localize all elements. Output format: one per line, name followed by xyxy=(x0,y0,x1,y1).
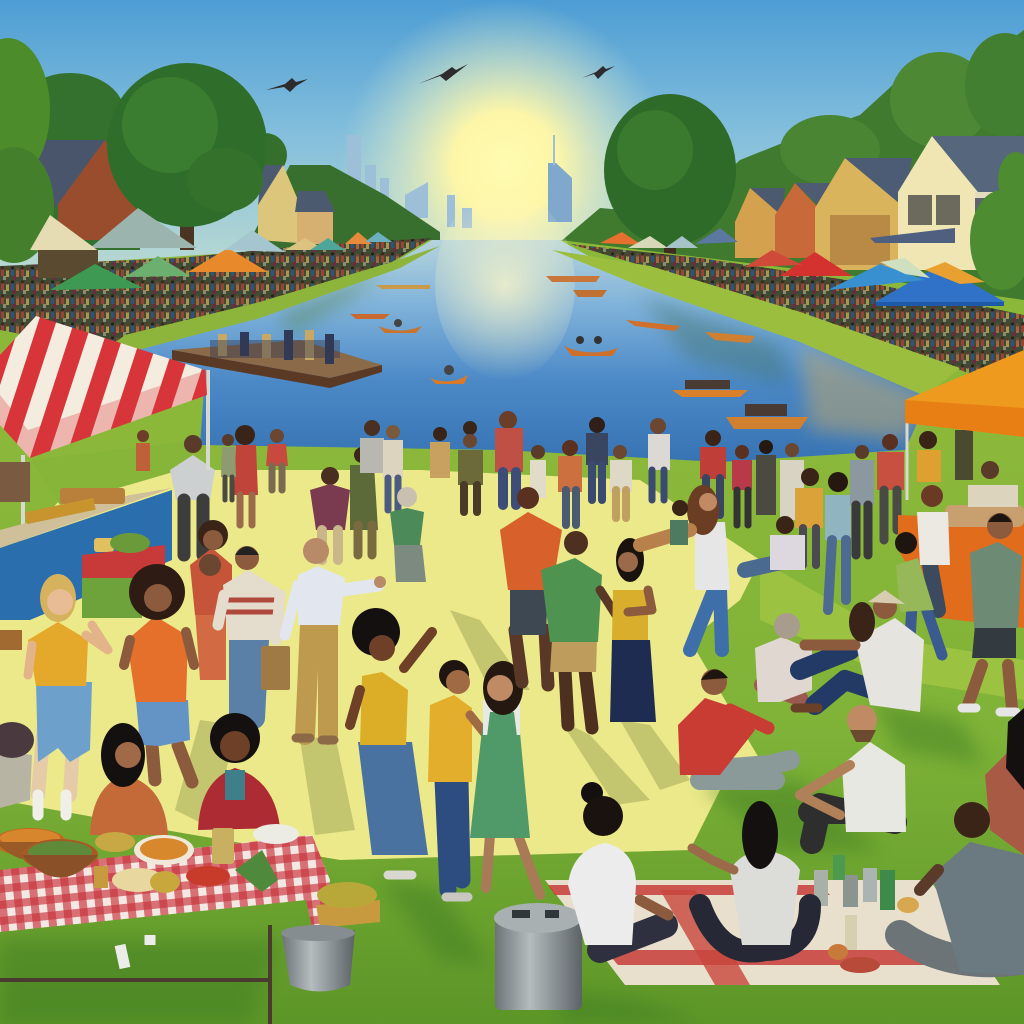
person: man green shirt xyxy=(541,531,630,728)
crowd: left shore xyxy=(0,238,432,350)
person: seated woman white tee, back view xyxy=(692,801,810,952)
person: woman red cardigan with afro xyxy=(198,713,280,830)
stage platform on lake xyxy=(172,330,382,388)
person: right man gray tee xyxy=(962,513,1022,712)
grass patch: left of tent xyxy=(30,440,200,505)
person: woman navy long dress xyxy=(610,538,656,722)
grass: sun-dappled right xyxy=(760,560,1024,700)
grassy strip: left bank xyxy=(105,246,440,352)
background hills right xyxy=(560,30,1024,300)
person: woman behind food table xyxy=(90,723,168,835)
house: large cream right xyxy=(870,136,1024,270)
person shadows xyxy=(175,610,690,835)
person: edge woman patterned dress xyxy=(985,708,1024,855)
food bowls and dishes xyxy=(0,824,299,893)
person: woman white top and jeans walking xyxy=(687,485,730,650)
food stall: orange table right xyxy=(898,461,1024,628)
person: seated woman with bun, back view xyxy=(568,782,668,950)
person: seated man with hat xyxy=(795,590,924,712)
tree: far left edge xyxy=(0,38,54,263)
person: seated man gray tee at right xyxy=(900,802,1024,975)
city skyline xyxy=(347,135,572,228)
stall display: left flowers and bowl xyxy=(0,630,34,808)
houses: left yellow xyxy=(258,165,335,244)
person: seated man red sweater xyxy=(678,669,790,780)
food table with gingham cloth xyxy=(0,835,330,1024)
picnic items xyxy=(814,855,919,973)
person: seated person mid right xyxy=(745,516,805,570)
tree: large left xyxy=(107,63,267,250)
person: woman yellow shirt xyxy=(428,660,486,897)
ground base xyxy=(0,240,1024,1024)
house: red barn left xyxy=(30,140,136,240)
crowd: right shore xyxy=(570,244,1024,395)
grassy strip: right bank xyxy=(552,250,960,396)
person: man striped sweater xyxy=(218,546,282,718)
lake xyxy=(130,190,930,462)
crate of food beside table xyxy=(316,882,380,928)
tents: right row xyxy=(600,228,1005,306)
picnic blanket xyxy=(545,880,1000,985)
sky xyxy=(0,0,1024,300)
food stall: blue table left xyxy=(0,462,172,620)
person: man orange shirt xyxy=(500,487,562,685)
tent: orange canopy right xyxy=(905,350,1024,500)
metal bucket on grass xyxy=(494,903,582,1010)
metal pail under table xyxy=(281,925,355,992)
sunlit path xyxy=(0,470,760,860)
sun glow xyxy=(0,0,1024,300)
grass shadows xyxy=(0,700,985,1024)
background trees left xyxy=(15,73,440,250)
tree: right edge xyxy=(970,152,1024,290)
tree: right of sun xyxy=(604,94,736,255)
person: woman yellow tank and black afro xyxy=(350,608,432,875)
person: woman green apron xyxy=(470,661,540,895)
person: woman with baby xyxy=(190,520,232,680)
planes xyxy=(266,64,615,92)
person: woman yellow top xyxy=(28,574,108,815)
person: green top walking xyxy=(895,532,942,655)
person: seated man white with grey hair xyxy=(755,613,812,702)
briefcase xyxy=(261,646,290,690)
houses: right row xyxy=(735,158,912,270)
person: reclining woman on blanket xyxy=(640,500,690,545)
person: man in white shirt and khaki trousers xyxy=(285,538,386,740)
feet under table xyxy=(120,935,150,968)
boats xyxy=(350,276,808,429)
tent: red and white striped canopy xyxy=(0,316,208,620)
mid crowd: distant people row xyxy=(136,411,973,610)
person: standing white shirt by stall xyxy=(917,485,950,610)
tents: left row xyxy=(30,208,392,290)
person: seated bald man white tee xyxy=(800,705,906,842)
person: woman orange top xyxy=(124,564,194,782)
